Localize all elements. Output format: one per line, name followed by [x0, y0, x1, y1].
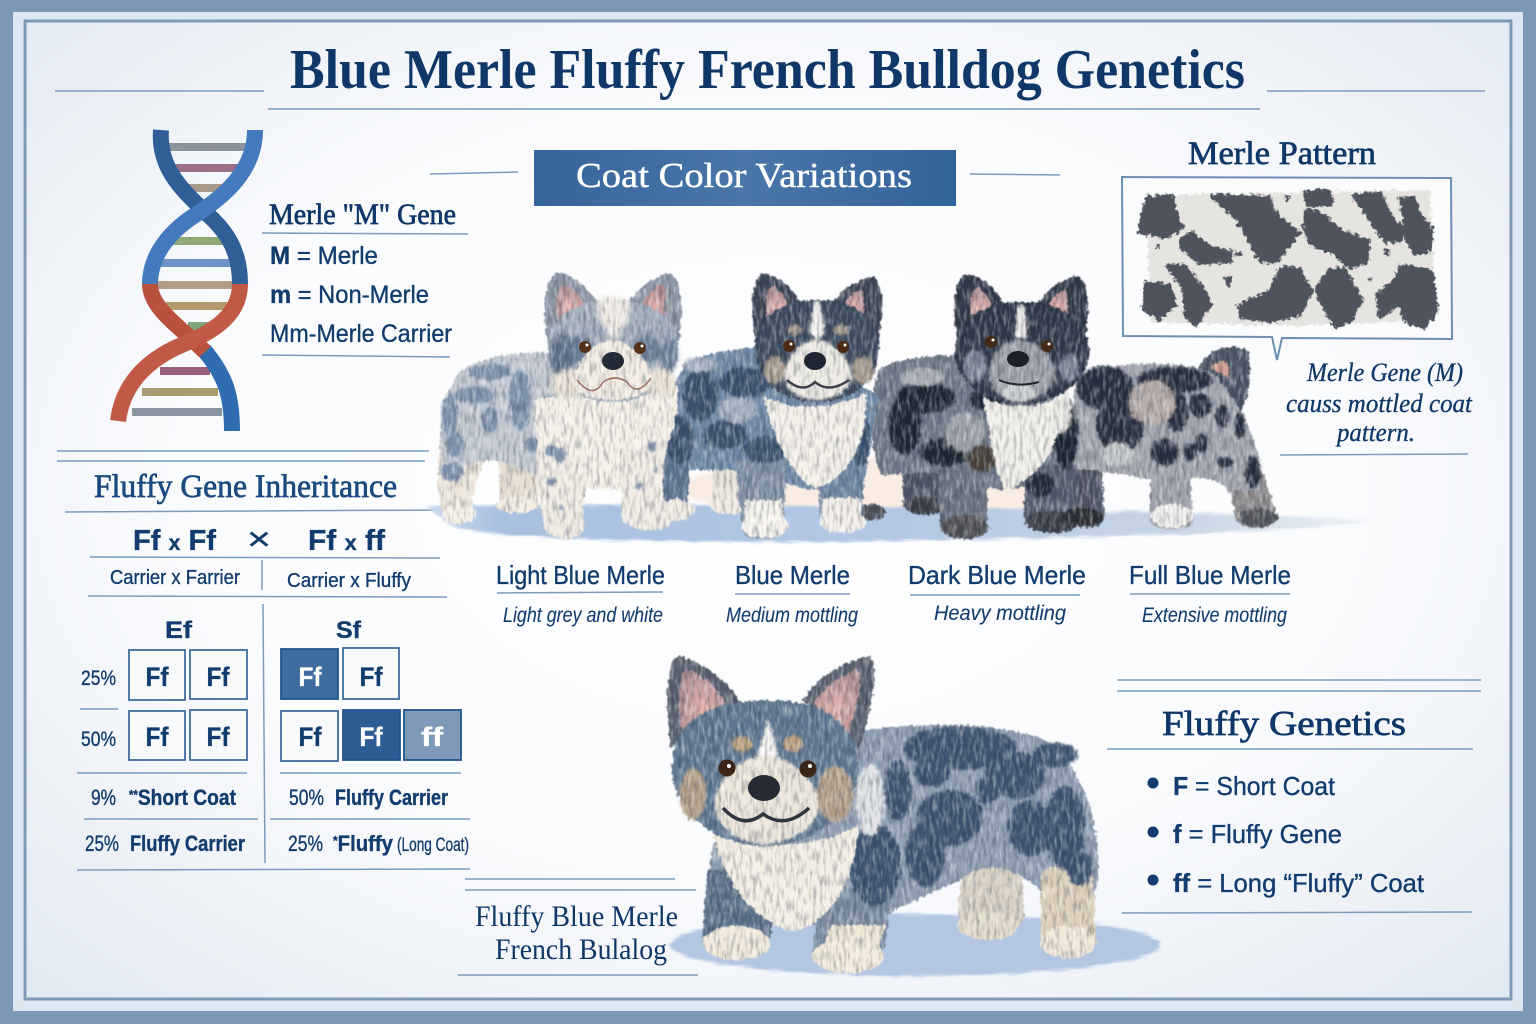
title: Blue Merle Fluffy French Bulldog Genetics: [290, 39, 1245, 101]
label: light blue merle: [496, 560, 665, 627]
head: [545, 272, 681, 402]
caption: merle gene: Merle Gene (M): [1306, 358, 1463, 387]
punnett square: carrier x fluffy: [281, 617, 461, 761]
results table: 25%: [288, 831, 323, 856]
punnett square: carrier x carrier: 25%: [81, 667, 116, 690]
ground shadow: dog group: [425, 458, 1370, 542]
punnett square: carrier x fluffy: Ff: [298, 722, 322, 752]
text: Mm Merle Carrier: Mm-Merle Carrier: [270, 320, 452, 348]
banner: coat color variations: Coat Color Variations: [576, 156, 912, 195]
results table: 9%: [91, 785, 116, 810]
punnett square: carrier x fluffy: Ff: [360, 662, 383, 692]
results table: **: [129, 787, 139, 802]
punnett square: carrier x carrier: Ff: [146, 662, 169, 692]
text: m = Non-Merle: m = Non-Merle: [270, 281, 429, 309]
title: [55, 39, 1485, 109]
cross labels: Carrier x Fluffy: [287, 570, 411, 592]
dog: fluffy blue merle main: [667, 656, 1098, 973]
results table: *: [333, 833, 339, 848]
caption: merle gene: [1280, 358, 1473, 455]
results table: [77, 773, 470, 870]
punnett square: carrier x carrier: Ff: [146, 722, 169, 752]
caption: merle gene: causs mottled coat: [1286, 389, 1473, 418]
cross labels: ×: [247, 521, 271, 557]
callout box: [1122, 177, 1452, 360]
cross labels: Ff x Ff: [133, 525, 216, 557]
cross labels: [110, 521, 411, 592]
label: dark blue merle: [908, 560, 1086, 625]
punnett square: carrier x fluffy: Sf: [336, 617, 362, 644]
punnett square: carrier x carrier: Ff: [206, 662, 230, 692]
label: full blue merle: Extensive mottling: [1142, 604, 1287, 627]
panel: merle pattern: [1122, 136, 1473, 455]
results table: 50%: [289, 785, 324, 810]
label: light blue merle: Light Blue Merle: [496, 560, 665, 590]
ground shadow: main dog: [670, 914, 1160, 976]
variation labels: [496, 560, 1291, 627]
head: [954, 274, 1089, 404]
label: dark blue merle: Dark Blue Merle: [908, 560, 1086, 590]
bullet: F short coat: F = Short Coat: [1173, 771, 1336, 801]
panel: fluffy gene inheritance: [57, 451, 470, 870]
icon: DNA double helix: [118, 130, 255, 431]
punnett square: carrier x carrier: 50%: [81, 728, 116, 751]
label: full blue merle: [1129, 560, 1291, 627]
caption: fluffy blue merle french bulldog: Fluffy Blue Merle: [475, 900, 678, 933]
heading: merle gene: Merle "M" Gene: [269, 198, 456, 231]
results table: Fluffy: [338, 831, 394, 856]
merle swatch: [1138, 190, 1438, 328]
results table: 25%: [85, 831, 119, 856]
label: full blue merle: Full Blue Merle: [1129, 560, 1291, 590]
dog: light blue merle: [438, 272, 681, 539]
panel: fluffy genetics: [1107, 680, 1481, 913]
punnett square: carrier x fluffy: Ff: [360, 722, 383, 752]
text: M = Merle: M = Merle: [270, 242, 378, 270]
punnett square: carrier x carrier: Ef: [165, 617, 193, 644]
heading: fluffy genetics: Fluffy Genetics: [1162, 704, 1406, 743]
heading: merle pattern: Merle Pattern: [1188, 136, 1376, 172]
banner: coat color variations: [430, 150, 1060, 206]
label: dark blue merle: Heavy mottling: [934, 602, 1066, 625]
dog: full blue merle: [1066, 347, 1278, 529]
caption: merle gene: pattern.: [1335, 418, 1415, 447]
punnett square: carrier x fluffy: Ff: [298, 662, 322, 692]
label: blue merle: Blue Merle: [735, 560, 850, 590]
heading: fluffy gene inheritance: Fluffy Gene Inheritance: [94, 469, 397, 505]
caption: fluffy blue merle french bulldog: [458, 879, 698, 975]
label: blue merle: [726, 560, 858, 627]
punnett square: carrier x carrier: Ff: [206, 722, 230, 752]
dog: blue merle: [658, 273, 882, 539]
bullet: f fluffy gene: f = Fluffy Gene: [1173, 819, 1342, 849]
label: light blue merle: Light grey and white: [503, 604, 663, 627]
head: [667, 656, 874, 846]
caption: fluffy blue merle french bulldog: French Bulalog: [495, 933, 667, 966]
head: [752, 273, 882, 402]
panel: merle M gene: [262, 198, 468, 357]
cross labels: Carrier x Farrier: [110, 567, 240, 589]
results table: Fluffy Carrier: [130, 831, 245, 856]
bullet: ff long fluffy coat: ff = Long “Fluffy” Coat: [1173, 868, 1425, 898]
label: blue merle: Medium mottling: [726, 604, 858, 627]
results table: Fluffy Carrier: [335, 785, 448, 810]
punnett square: carrier x carrier: [80, 617, 247, 760]
cross labels: Ff x ff: [308, 525, 385, 557]
punnett square: carrier x fluffy: ff: [421, 722, 444, 752]
results table: Short Coat: [138, 785, 237, 810]
dog: dark blue merle: [858, 274, 1102, 539]
results table: (Long Coat): [397, 835, 469, 856]
